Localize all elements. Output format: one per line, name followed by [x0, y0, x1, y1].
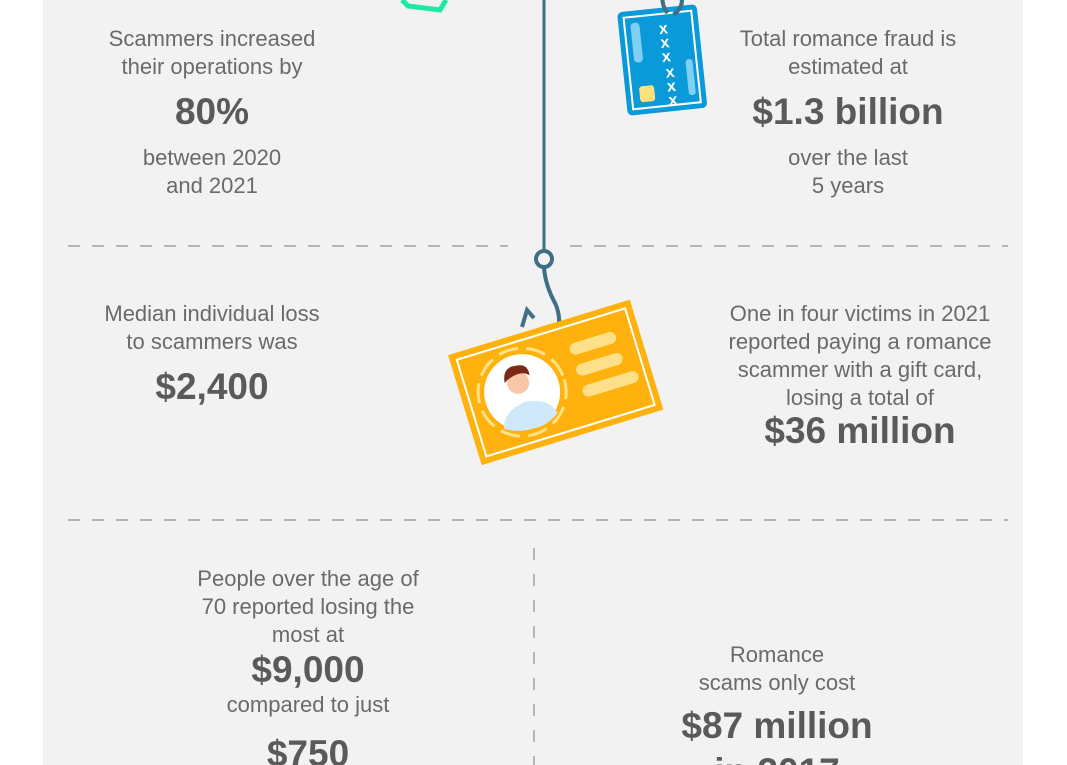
stat: gift card: $36 million	[764, 410, 956, 451]
stat: operations increase: 80%	[175, 91, 249, 132]
stat: median loss	[104, 301, 320, 407]
stat: operations increase: their operations by between 2020	[122, 54, 302, 170]
stat: gift card: One in four victims in 2021	[730, 301, 990, 326]
stat: median loss: $2,400	[155, 366, 269, 407]
icon: credit card: x	[660, 34, 670, 52]
stat: operations increase	[109, 26, 315, 198]
stat: gift card: reported paying a romance	[729, 329, 991, 354]
stat: over 70: most at compared to just	[227, 622, 389, 717]
stat: 2017: Romance	[730, 642, 824, 667]
stat: median loss: Median individual loss	[104, 301, 320, 326]
fishing line	[522, 0, 559, 340]
icon: green card corner	[402, 0, 446, 10]
icon: ID card	[448, 300, 663, 465]
stat: total romance fraud: $1.3 billion	[752, 91, 944, 132]
icon: credit card: x	[665, 64, 675, 82]
stat: total romance fraud	[740, 26, 956, 198]
stat: operations increase: Scammers increased	[109, 26, 315, 51]
stat: gift card	[729, 301, 991, 451]
stat: operations increase: and 2021	[166, 173, 258, 198]
stat: over 70	[197, 566, 419, 765]
stat: median loss: to scammers was	[126, 329, 298, 354]
icon: credit card: x	[668, 92, 678, 110]
stat: 2017	[681, 642, 873, 765]
icon: credit card: x	[658, 20, 669, 38]
stat: total romance fraud: 5 years	[812, 173, 884, 198]
stat: over 70: 70 reported losing the	[202, 594, 414, 619]
stat: over 70: $9,000	[251, 649, 365, 690]
icon: credit card	[616, 0, 707, 116]
stat: gift card: losing a total of	[786, 385, 934, 410]
stat: over 70: People over the age of	[197, 566, 419, 591]
stat: 2017: $87 million	[681, 705, 873, 746]
icon: credit card: x	[666, 78, 677, 96]
icon: credit card: x	[661, 48, 672, 66]
stat: total romance fraud: Total romance fraud is	[740, 26, 956, 51]
stat: 2017: scams only cost	[699, 670, 855, 695]
stat: gift card: scammer with a gift card,	[738, 357, 982, 382]
stat: total romance fraud: estimated at over the last	[788, 54, 908, 170]
